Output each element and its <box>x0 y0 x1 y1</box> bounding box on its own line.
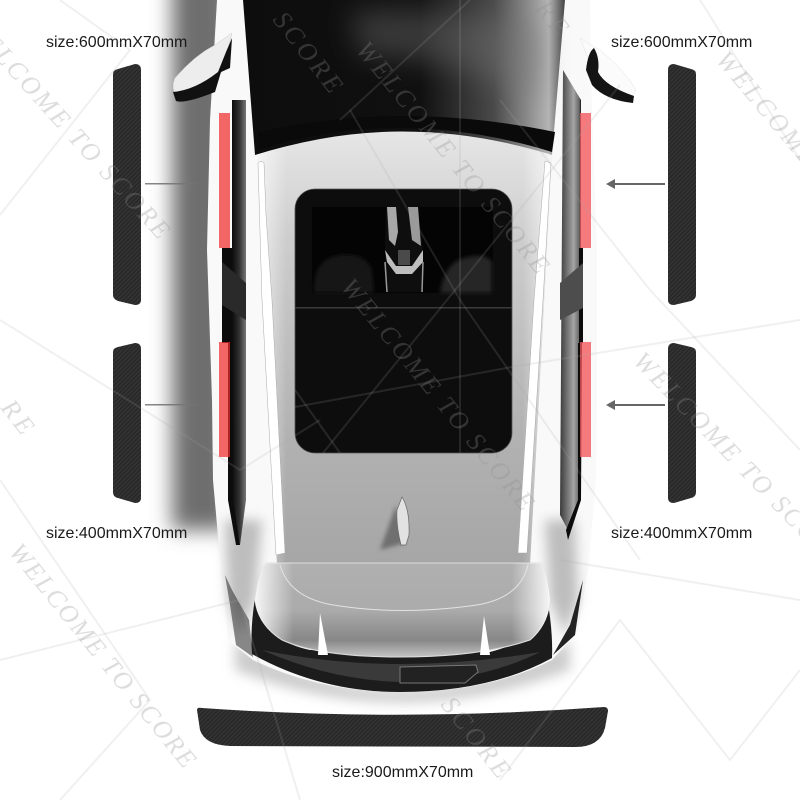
left front red highlight <box>219 113 230 248</box>
watermark text: WELCOME TO SCORE <box>3 538 202 773</box>
left pillar base <box>222 248 232 343</box>
left seat <box>314 255 374 293</box>
right rear red highlight <box>580 342 591 457</box>
size label bottom: size:900mmX70mm <box>332 764 473 781</box>
upper left sticker <box>113 64 141 305</box>
right lower window slit <box>566 343 582 540</box>
left side window <box>232 100 246 545</box>
rear logo plate <box>400 665 478 683</box>
right side window <box>560 70 581 530</box>
left arrow lower <box>145 404 200 406</box>
left rear black strip <box>225 575 253 657</box>
roof edge highlights <box>257 132 552 565</box>
sunroof <box>295 189 512 453</box>
left rear red highlight <box>219 342 230 457</box>
upper right sticker <box>668 64 696 305</box>
sunroof seam <box>295 307 512 308</box>
car body shell <box>207 0 597 692</box>
watermark text: SCORE <box>267 6 349 99</box>
right mirror <box>580 38 636 103</box>
right front red highlight <box>580 113 591 248</box>
left b-pillar <box>222 262 246 320</box>
size label lower left: size:400mmX70mm <box>46 525 187 542</box>
tail highlights <box>318 613 490 655</box>
right roof rail <box>518 161 551 553</box>
roof <box>257 132 552 565</box>
antenna fin shadow <box>380 505 405 550</box>
right rear black strip <box>553 580 583 655</box>
size label lower right: size:400mmX70mm <box>611 525 752 542</box>
left roof rail <box>258 162 285 555</box>
right seat <box>440 256 492 293</box>
right b-pillar <box>560 263 583 320</box>
watermark text: WELCOME TO SCORE <box>335 273 540 516</box>
spoiler crease <box>280 565 528 610</box>
car top view <box>173 0 636 692</box>
rear bumper sticker <box>197 707 608 747</box>
windshield lower dark band <box>258 116 555 152</box>
watermark text: SCORE <box>435 691 517 784</box>
right pillar base <box>579 248 583 343</box>
tailgate side highlights <box>255 563 550 657</box>
bumper grey band <box>262 650 540 682</box>
rear fender shading <box>225 520 578 635</box>
windshield <box>243 0 565 155</box>
tailgate <box>255 563 550 657</box>
sunroof interior view <box>312 207 493 293</box>
right arrow upper <box>606 179 665 189</box>
antenna fin <box>397 497 409 545</box>
right arrow lower <box>606 400 665 410</box>
rear bumper <box>251 598 552 692</box>
windshield highlight <box>350 10 545 100</box>
size label upper right: size:600mmX70mm <box>611 34 752 51</box>
watermark text: WELCOME TO SCORE <box>350 36 555 279</box>
car ground shadow <box>172 0 570 702</box>
left arrow upper <box>145 183 200 184</box>
lower right sticker <box>668 343 696 503</box>
lower left sticker <box>113 343 141 503</box>
size label upper left: size:600mmX70mm <box>46 34 187 51</box>
left mirror <box>173 33 232 102</box>
gear console <box>385 207 423 292</box>
left lower window slit <box>228 343 240 545</box>
